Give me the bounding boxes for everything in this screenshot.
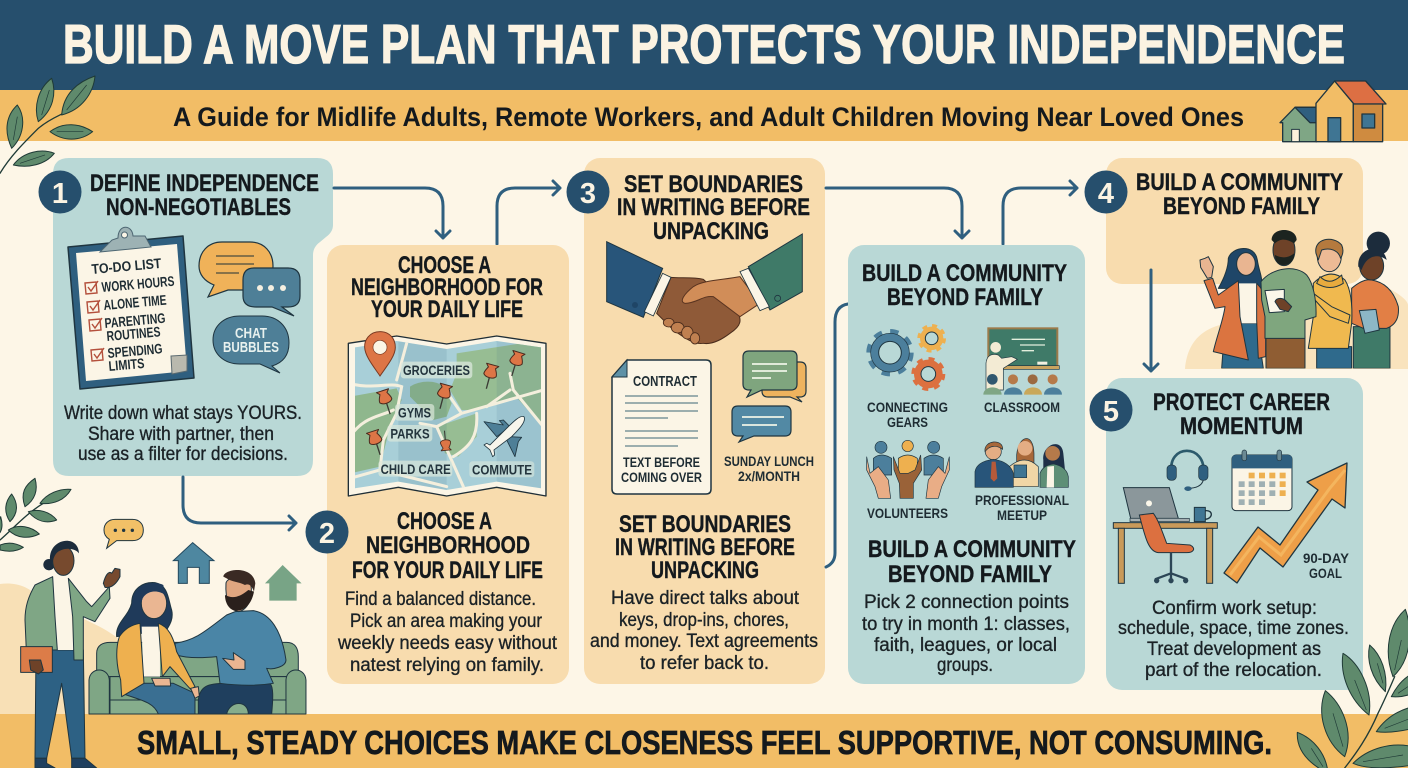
step 5 body text: Confirm work setup: — [1152, 597, 1317, 619]
arrow: neighborhood to step 3 — [497, 181, 560, 244]
step 2 body text: Find a balanced distance. — [345, 588, 536, 610]
subtitle band — [0, 90, 1408, 141]
map labels: CHILD CARE — [381, 461, 451, 477]
step 5 heading: PROTECT CAREER — [1153, 389, 1330, 416]
icon: classroom — [983, 328, 1062, 395]
icon: chat bubbles: CHAT — [235, 326, 267, 342]
step 3 top heading — [617, 171, 810, 245]
bearded man in green sweater — [1261, 230, 1316, 368]
step 2 top heading: CHOOSE A — [398, 252, 491, 279]
step 3 body text: to refer back to. — [640, 652, 769, 674]
step 4 badge — [1084, 170, 1128, 214]
arrow: step 4 down to step 5 — [1144, 270, 1158, 371]
community icon labels — [867, 399, 1069, 523]
panel: step 4 — [1084, 158, 1363, 284]
leaves: top left — [0, 76, 95, 173]
step 2 lower heading — [352, 508, 543, 584]
header banner — [0, 0, 1408, 90]
icon: handshake — [607, 234, 802, 344]
illustration: family on sofa with adviser — [21, 519, 306, 768]
step 5 badge: 5 — [1103, 396, 1119, 428]
arrow: step 3 to community panel — [826, 188, 969, 238]
icon: clipboard to-do list: PARENTING — [104, 310, 166, 331]
step 5 badge — [1090, 388, 1132, 432]
community lower heading: BEYOND FAMILY — [888, 561, 1052, 588]
step 3 badge: 3 — [580, 178, 596, 210]
community body text: groups. — [937, 654, 993, 676]
icon: clipboard to-do list: ROUTINES — [106, 323, 161, 344]
panel: step 5 — [1106, 378, 1363, 690]
community body text: Pick 2 connection points — [864, 591, 1069, 613]
arrow: step 3 side connector — [826, 304, 848, 567]
step 2 badge: 2 — [319, 518, 335, 550]
step 2 body text — [337, 588, 558, 676]
step 5 heading: MOMENTUM — [1180, 413, 1303, 440]
step 3 lower heading: IN WRITING BEFORE — [615, 534, 795, 561]
step 3 lower heading — [615, 511, 795, 584]
step 2 body text: natest relying on family. — [350, 654, 544, 676]
step 2 body text: weekly needs easy without — [337, 632, 558, 654]
icon: volunteers — [867, 440, 949, 498]
panel: community — [848, 245, 1085, 684]
map pin: location — [365, 332, 395, 376]
subtitle: A Guide for Midlife Adults, Remote Workers, and Adult Children Moving Near Loved Ones — [173, 102, 1244, 132]
step 1 body text: Share with partner, then — [88, 423, 274, 445]
woman seated — [117, 583, 199, 714]
step 5 body text — [1118, 597, 1349, 681]
illustration: group of friends — [1200, 230, 1398, 368]
icon: message bubbles: 2x/MONTH — [738, 468, 800, 484]
icon: airplane — [484, 416, 524, 457]
leaves: bottom right — [1297, 609, 1408, 768]
step 3 body text: and money. Text agreements — [590, 630, 818, 652]
icon: contract: COMING OVER — [621, 469, 702, 485]
icon: contract: TEXT BEFORE — [623, 454, 700, 470]
man in yellow hoodie — [1308, 239, 1352, 368]
step 1 badge — [38, 170, 82, 214]
icon: clipboard to-do list: TO-DO LIST — [91, 255, 162, 277]
step 3 lower heading: UNPACKING — [651, 557, 759, 584]
man seated — [175, 570, 286, 714]
step 3 body text — [590, 587, 818, 674]
step 5 body text: Treat development as — [1147, 638, 1321, 660]
community body text: faith, leagues, or local — [874, 634, 1057, 656]
step 1 body text — [64, 402, 302, 465]
step 1 body text: use as a filter for decisions. — [78, 443, 288, 465]
community lower heading — [868, 536, 1076, 588]
background blob: right — [1185, 285, 1408, 369]
step 1 heading — [90, 170, 319, 221]
community body text — [862, 591, 1070, 676]
community lower heading: BUILD A COMMUNITY — [868, 536, 1076, 563]
step 2 top heading — [351, 252, 543, 323]
map labels: COMMUTE — [472, 462, 532, 478]
woman in orange jacket — [1200, 249, 1266, 368]
icon: green house — [265, 565, 302, 601]
panel: step 2 — [327, 245, 569, 684]
icon: message bubbles — [724, 351, 814, 484]
icon: growth arrow — [1224, 463, 1350, 583]
icon: connecting gears — [869, 326, 944, 389]
step 2 badge — [306, 510, 348, 554]
arrow: community panel to step 4 — [1003, 181, 1077, 244]
icon: growth arrow: GOAL — [1309, 565, 1342, 581]
step 5 body text: schedule, space, time zones. — [1118, 617, 1349, 639]
step 4 badge: 4 — [1098, 178, 1114, 210]
icon: message bubbles: SUNDAY LUNCH — [724, 453, 814, 469]
step 1 heading: NON-NEGOTIABLES — [106, 194, 291, 221]
arrow: step 1 down to step 2 — [183, 477, 296, 530]
step 5 body text: part of the relocation. — [1145, 659, 1322, 681]
woman standing — [21, 541, 120, 768]
icon: houses — [1280, 81, 1386, 142]
map labels — [378, 362, 534, 478]
footer band — [0, 714, 1408, 768]
icon: chat bubbles — [199, 242, 300, 373]
icon: clipboard to-do list: LIMITS — [108, 355, 145, 374]
icon: contract: CONTRACT — [633, 373, 697, 390]
step 1 body text: Write down what stays YOURS. — [64, 402, 302, 424]
step 3 badge — [566, 170, 610, 214]
icon: blue house — [173, 543, 214, 583]
step 3 top heading: UNPACKING — [653, 218, 769, 245]
step 3 lower heading: SET BOUNDARIES — [619, 511, 791, 538]
step 1 heading: DEFINE INDEPENDENCE — [90, 170, 319, 197]
icon: clipboard to-do list: WORK HOURS — [101, 273, 175, 295]
panel: step 1 — [38, 158, 333, 476]
woman with orange sweater — [1352, 232, 1398, 368]
arrow: step 1 to choose neighborhood — [334, 188, 450, 238]
background blob: left — [0, 583, 120, 714]
community icon labels: CONNECTING — [867, 399, 948, 415]
icon: clipboard to-do list: SPENDING — [107, 340, 163, 361]
icon: calendar — [1232, 450, 1292, 511]
step 4 heading: BUILD A COMMUNITY — [1136, 169, 1343, 196]
icon: remote work desk — [1113, 451, 1217, 583]
community top heading: BEYOND FAMILY — [887, 284, 1043, 311]
step 3 body text: keys, drop-ins, chores, — [619, 609, 789, 631]
icon: clipboard to-do list: ALONE TIME — [103, 292, 167, 313]
community icon labels: PROFESSIONAL — [975, 492, 1069, 508]
community icon labels: GEARS — [887, 414, 928, 430]
step 2 body text: Pick an area making your — [350, 610, 542, 632]
sofa — [89, 642, 306, 714]
icon: professional meetup — [975, 438, 1068, 487]
community body text: to try in month 1: classes, — [862, 613, 1070, 635]
icon: neighborhood map — [348, 332, 548, 500]
step 2 lower heading: CHOOSE A — [397, 508, 492, 535]
community icon labels: CLASSROOM — [984, 399, 1060, 415]
icon: clipboard to-do list — [68, 227, 194, 389]
speech bubble — [104, 519, 143, 548]
step 2 top heading: YOUR DAILY LIFE — [371, 296, 523, 323]
community icon labels: VOLUNTEERS — [867, 505, 948, 521]
step 4 heading — [1136, 169, 1343, 220]
step 4 heading: BEYOND FAMILY — [1163, 193, 1320, 220]
step 1 badge: 1 — [52, 178, 68, 210]
step 2 top heading: NEIGHBORHOOD FOR — [351, 274, 543, 301]
step 2 lower heading: NEIGHBORHOOD — [366, 532, 530, 559]
map labels: GYMS — [398, 404, 431, 420]
step 3 top heading: IN WRITING BEFORE — [617, 194, 810, 221]
step 5 heading — [1153, 389, 1330, 440]
step 2 lower heading: FOR YOUR DAILY LIFE — [352, 557, 543, 584]
panel: step 3 — [566, 158, 825, 684]
icon: growth arrow: 90-DAY — [1303, 550, 1350, 566]
icon: chat bubbles: BUBBLES — [223, 340, 279, 356]
step 3 body text: Have direct talks about — [611, 587, 800, 609]
icon: contract — [612, 360, 711, 494]
community top heading: BUILD A COMMUNITY — [862, 260, 1067, 287]
community icon labels: MEETUP — [997, 507, 1047, 523]
map push pins — [366, 350, 525, 457]
map labels: GROCERIES — [403, 362, 470, 378]
map labels: PARKS — [390, 425, 430, 441]
leaves: bottom left — [0, 478, 71, 551]
community top heading — [862, 260, 1067, 311]
step 3 top heading: SET BOUNDARIES — [624, 171, 803, 198]
